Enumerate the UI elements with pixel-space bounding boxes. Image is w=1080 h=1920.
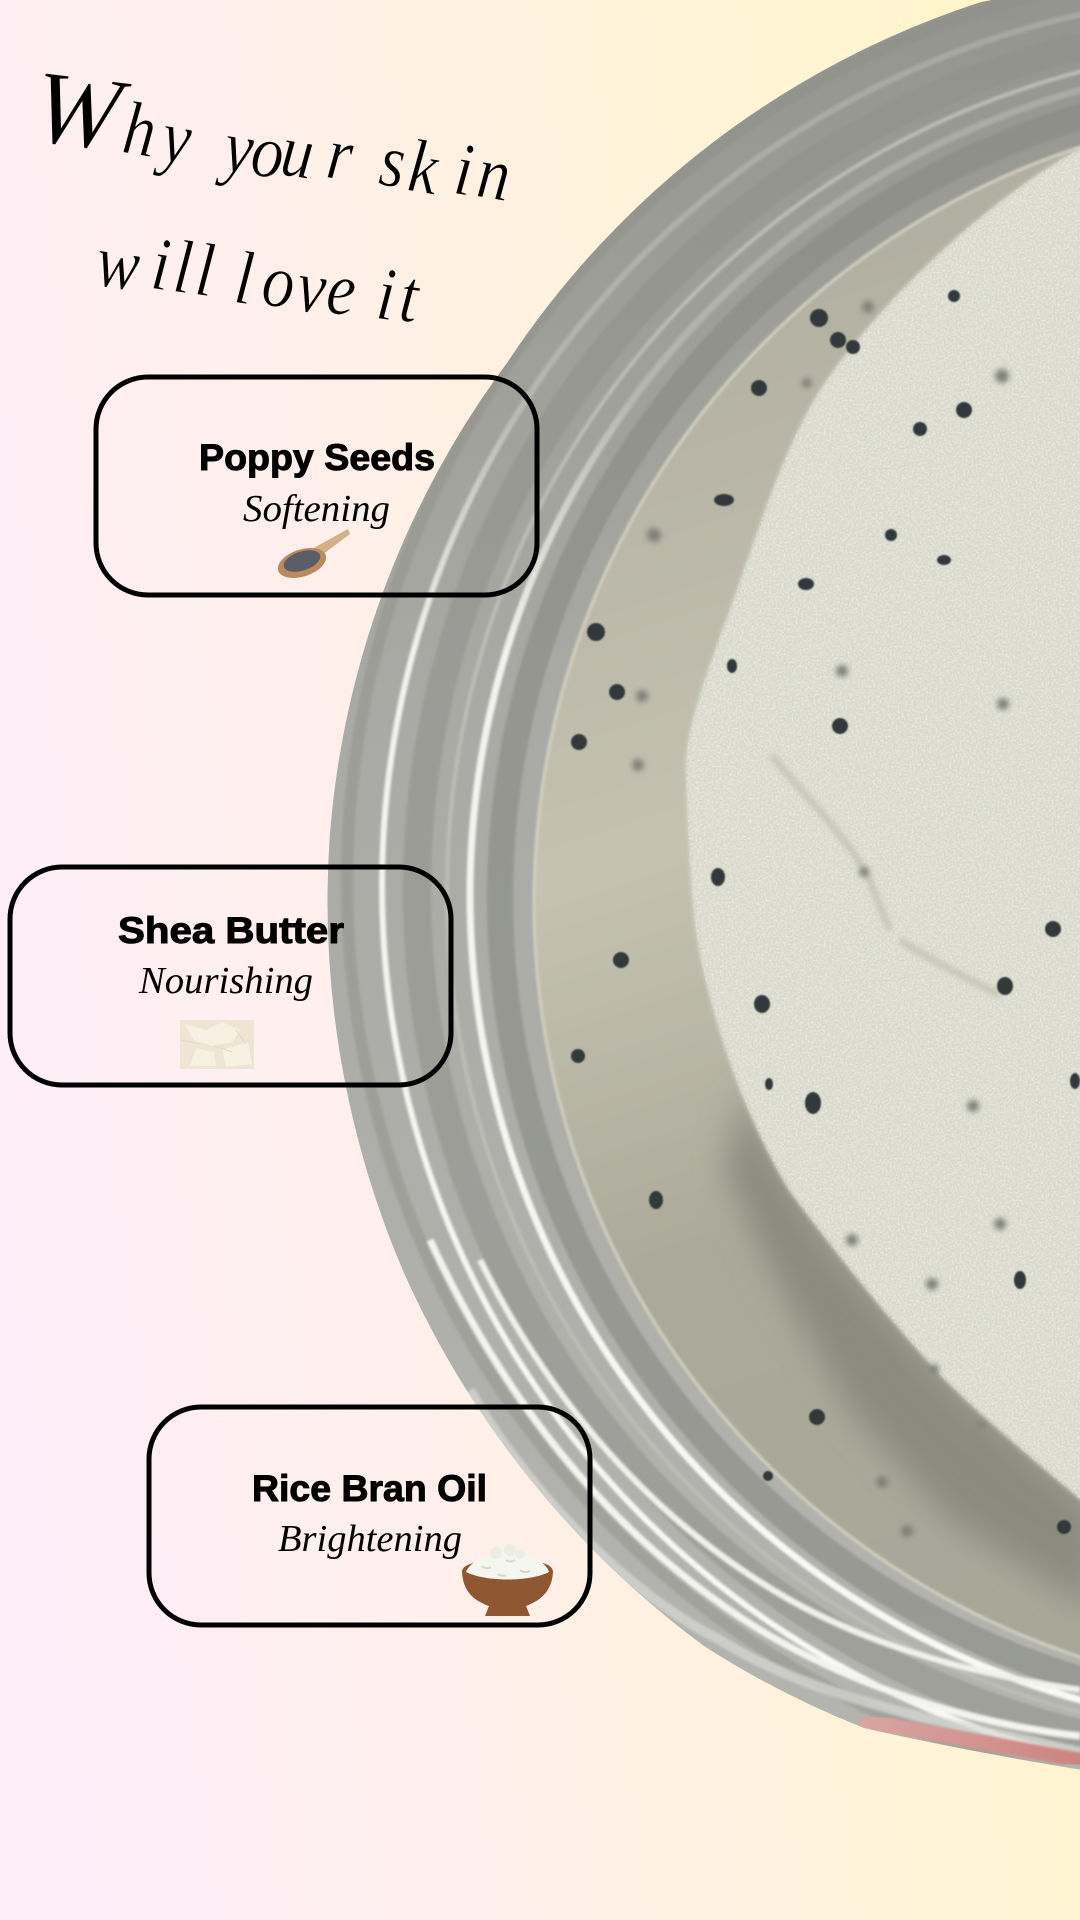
title initial W: W <box>27 49 136 174</box>
heading: Rice Bran Oil <box>252 1468 487 1509</box>
rim highlights <box>347 0 1080 1797</box>
title line 1: hyyourskin <box>119 86 515 218</box>
poppy seeds <box>571 290 1080 1534</box>
photo: open jar of scrub <box>300 0 1080 1800</box>
sugar mound <box>686 140 1080 1512</box>
shadow on cream <box>725 1090 1080 1610</box>
panel outline <box>10 867 451 1085</box>
red label edge <box>860 1720 1080 1762</box>
benefit: Softening <box>243 488 390 530</box>
icon: shea butter flakes <box>180 1020 254 1069</box>
panel: shea butter <box>10 867 451 1085</box>
mound crease <box>771 755 1000 995</box>
title line 2: willloveit <box>93 219 424 340</box>
icon: spoon of seeds <box>274 529 350 584</box>
panel: rice bran oil <box>149 1407 590 1625</box>
faint seeds <box>632 301 1009 1537</box>
icon: bowl of rice <box>462 1544 553 1616</box>
heading: Shea Butter <box>118 910 344 951</box>
title <box>27 49 515 340</box>
panel: poppy seeds <box>96 377 537 595</box>
cream layer <box>534 107 1080 1697</box>
jar rim <box>300 0 1080 1800</box>
panel outline <box>96 377 537 595</box>
benefit: Nourishing <box>138 960 313 1002</box>
panel outline <box>149 1407 590 1625</box>
heading: Poppy Seeds <box>199 437 435 478</box>
benefit: Brightening <box>278 1518 462 1560</box>
sugar grain texture <box>686 140 1080 1512</box>
